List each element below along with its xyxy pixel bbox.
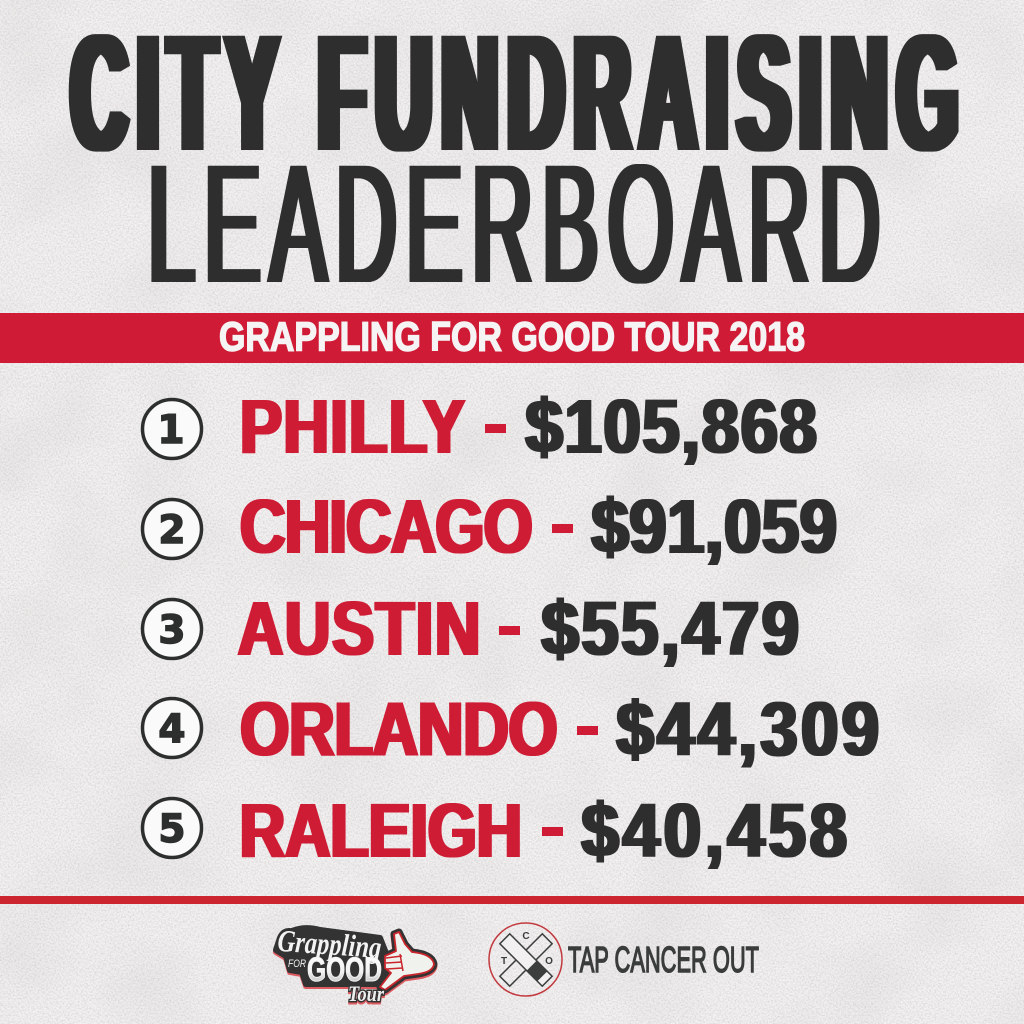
row 3: 3 xyxy=(158,608,186,653)
logo hand backing xyxy=(380,932,434,990)
title xyxy=(71,2,958,319)
title line 1: CITY FUNDRAISING xyxy=(71,2,958,186)
row 1: PHILLY xyxy=(240,383,465,469)
row 5: RALEIGH xyxy=(240,787,522,873)
row 2: 2 xyxy=(158,508,186,553)
logo: Tap Cancer Out xyxy=(489,923,759,996)
row 4: $44,309 xyxy=(616,687,879,773)
row 1 xyxy=(142,383,817,470)
row 2: $91,059 xyxy=(592,485,837,570)
emblem: O xyxy=(545,956,553,967)
row 3: $55,479 xyxy=(542,587,799,672)
row 5: $40,458 xyxy=(582,789,847,874)
banner: GRAPPLING FOR GOOD TOUR 2018 xyxy=(219,314,805,360)
title line 2: LEADERBOARD xyxy=(148,130,880,319)
row 1: $105,868 xyxy=(526,385,817,470)
row 2: CHICAGO xyxy=(240,483,533,569)
emblem: C xyxy=(522,931,530,942)
row 3 xyxy=(142,585,799,672)
logo backing shape xyxy=(276,928,388,984)
emblem: T xyxy=(501,956,507,967)
logo script word: Grappling xyxy=(276,923,383,965)
logo GOOD: GOOD xyxy=(307,951,382,989)
row 5: 5 xyxy=(158,807,186,852)
logo small word: FOR xyxy=(288,958,306,970)
row 4 xyxy=(142,686,879,773)
row 2 xyxy=(142,483,837,570)
logo hand xyxy=(380,932,434,990)
row 5 xyxy=(142,787,847,874)
banner xyxy=(0,313,1024,363)
emblem xyxy=(489,923,562,996)
wordmark: TAP CANCER OUT xyxy=(568,939,759,980)
row 4: 4 xyxy=(158,707,186,752)
row 3: AUSTIN xyxy=(238,585,480,671)
leaderboard rows xyxy=(142,383,879,874)
row 1: 1 xyxy=(157,408,185,453)
logo hand finger lines xyxy=(386,954,403,971)
logo: Grappling for Good Tour xyxy=(276,923,434,1006)
logo script Tour: Tour xyxy=(348,981,384,1006)
row 4: ORLANDO xyxy=(240,686,558,772)
footer rule xyxy=(0,896,1024,904)
